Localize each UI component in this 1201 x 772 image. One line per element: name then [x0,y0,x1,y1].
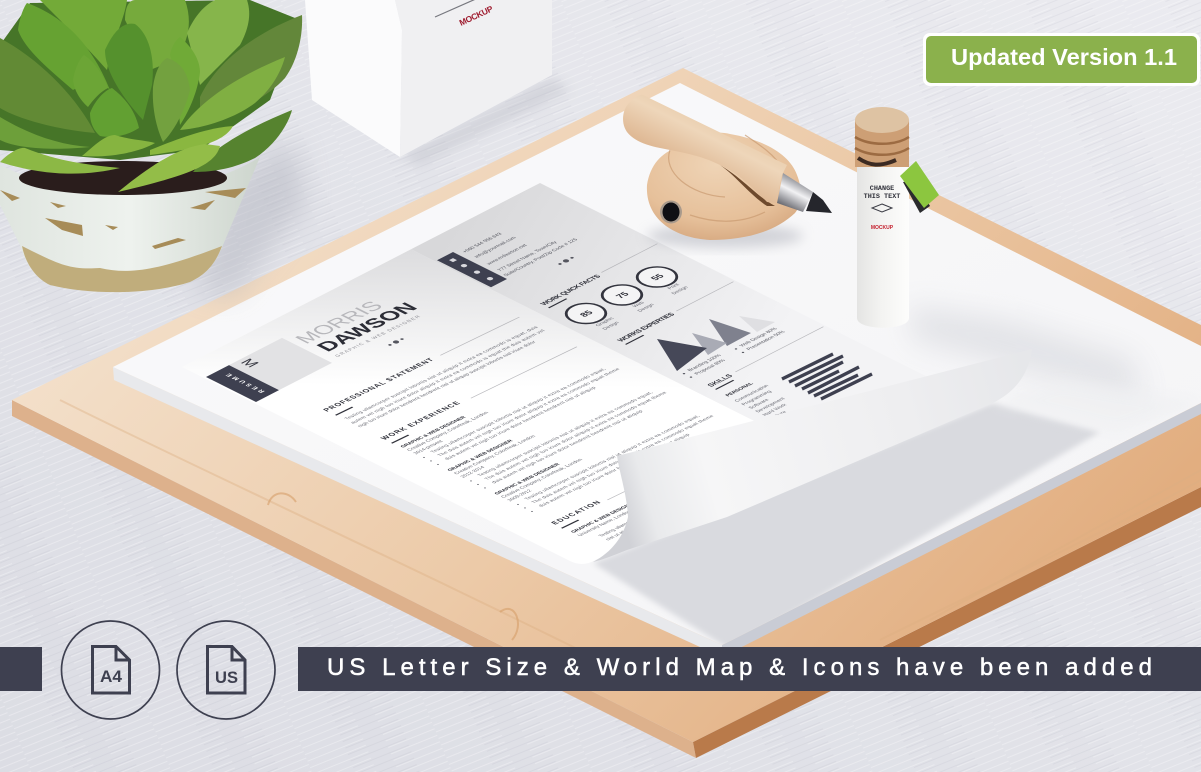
update banner [298,647,1201,691]
name: MORRIS [291,299,388,347]
name: GRAPHIC & WEB DESIGNER [334,315,423,358]
soil [19,161,227,195]
works expertise heading [617,281,741,345]
sheet body [182,249,811,567]
gauge 85: Graphic [594,316,616,327]
resume badge: RESUME [225,372,267,394]
icon: A4 document [62,621,160,719]
resume badge [206,365,279,402]
job entry 1: Testing ullamcorper suscipit lobortis nisl ut aliquip it extra ea commodo equat, [429,367,608,454]
gauge 85 [558,299,628,335]
wood knot marks [268,493,518,640]
cork stopper [855,107,909,167]
gauge 85: Design [601,321,621,331]
skills section: SKILLS [707,373,735,388]
job entry 3: Creative Company, Colorfreak, London [500,458,585,499]
contact details: 777 Street Name, Town/City [496,240,559,272]
professional statement section: autem vel nigh tuo iriure dolor aliquip it extra ea commodo is equat the duis autem vel [349,329,547,425]
resume sheet [182,183,940,567]
wooden pencil holder [623,95,832,248]
education section: Testing ullamcorper suscipit [597,508,660,538]
pot [0,157,260,292]
name dots [387,337,405,347]
works expertise heading: WORKS EXPERTIES [617,312,677,343]
resume main column content [233,271,792,547]
gauge 75: 75 [613,291,631,300]
icon: US document: US [215,668,238,687]
green tag [900,161,939,213]
bottle label: CHANGE [870,185,894,193]
work experience section: WORK EXPERIENCE [378,400,462,441]
job entry 3: duis autem vel nigh tuo iriure dolor hendrerit hendrerit nisl ut aliquip [537,433,692,508]
bag side gusset [305,0,402,157]
skills section: Hard Work [761,403,789,417]
work quick facts: WORK QUICK FACTS [540,274,603,307]
expertise legend: Proposal 80% [693,358,728,376]
job entry 1: GRAPHIC & WEB DESIGNER [399,415,468,449]
pot chipped paint [0,188,246,249]
job entry 3: 2009-2012 [506,489,534,502]
professional statement section: PROFESSIONAL STATEMENT [321,357,436,413]
update banner: US Letter Size & World Map & Icons have been added [327,654,1152,681]
work experience section [378,344,724,514]
job entry 2: Testing ullamcorper suscipit lobortis nisl ut aliquip it extra ea commodo equat, [476,391,655,477]
soft shadows on the pad [593,305,1201,650]
bottle label: MOCKUP [871,225,894,231]
pot worn base [22,246,222,292]
skills section: Development [754,397,787,414]
paper bag [305,0,570,165]
job entry 2: The duis autem vel nigh tuo iriure dolor aliquip it extra ea commodo equat theme [483,391,669,481]
education section [549,477,691,547]
contact details: +060 544 556 843 [461,232,504,254]
left footer bar [0,647,42,691]
bottle mockup [855,107,939,328]
curled page corner [593,349,1032,562]
job entry 2: duis autem vel nigh tuo iriure dolor hendrerit hendrerit nisl ut aliquip [490,409,645,484]
contact details [437,214,581,287]
gauge 75 [594,281,664,316]
bottle label [864,185,900,231]
steel tip [777,173,813,212]
base grain [669,135,782,221]
education section: EDUCATION [549,499,603,526]
expertise legend [681,325,787,380]
professional statement section: Testing ullamcorper suscipit lobortis nisl ut aliquip it extra ea commodo is equat, duis [343,325,540,421]
contact dots [557,256,575,266]
job entry 1: duis autem vel nigh tuo iriure dolor hendrerit hendrerit nisl ut aliquip [443,386,598,461]
contact details: www.mdawson.net [485,243,530,266]
version badge: Updated Version 1.1 [951,44,1177,70]
socket [660,200,682,224]
contact details: Suite/Country, Post/Zip Code # 125 [502,238,580,277]
potted plant [0,0,305,295]
job entry 2: 2012-2014 [459,465,487,479]
education section: University Name, London [576,510,633,537]
gauge 55: 55 [648,273,666,282]
expertise legend: Branding 100% [686,353,724,372]
skills section: Communication [733,384,771,403]
education section: nisl ut aliquip it extra [604,519,651,541]
icon: A4 document: A4 [100,667,123,686]
job entry 1: The duis autem vel nigh tuo iriure dolor aliquip it extra ea commodo equat theme [436,367,622,457]
job entry 3 [493,401,723,513]
name: DAWSON [312,300,423,354]
right column [411,183,928,443]
leaves [0,0,302,192]
job entry 1: 2014-present [412,439,445,455]
monogram block: M [236,357,262,370]
professional statement section: nigh tuo iriure dolor hendrerit hendrerit nisl ut aliquip suscipit lobortis nisl iriure dolor [356,340,538,428]
job entry 1: Creative Company, Colorfreak, London [406,411,491,452]
job entry 3: Testing ullamcorper suscipit lobortis nisl ut aliquip it extra ea commodo equat, [523,414,702,501]
wooden base [647,133,801,240]
wood pencil body [623,95,787,203]
bag rule [435,0,478,17]
skills section: Programming [740,390,773,407]
contact details: info@yourmail.com [473,236,518,259]
bag front panel [395,0,552,157]
graphite point [806,192,832,213]
skills section: PERSONAL [724,382,755,398]
job entry 2: Creative Company, Colorfreak, London [453,434,538,476]
job entry 3: GRAPHIC & WEB DESIGNER [493,462,562,496]
expertise legend: Web Design 80% [738,327,780,348]
job entry 2: GRAPHIC & WEB DESIGNER [446,439,515,472]
gauge 55: Print [666,283,682,290]
gauge 85: 85 [577,309,595,318]
job entry 3: The duis autem vel nigh tuo iriure dolor aliquip it extra ea commodo equat theme [530,414,716,504]
slit shadow [720,165,775,206]
icon: US document [177,621,275,719]
work quick facts [539,243,718,335]
name [291,291,430,359]
skills section [705,326,891,421]
expertise triangle chart [657,316,775,371]
monogram block [229,338,332,390]
education section: GRAPHIC & WEB DESIGNER [570,501,638,534]
gauge 75: Web [631,301,646,308]
job entry 2 [446,377,676,489]
gauge 55 [629,263,699,298]
version badge [923,33,1200,86]
gauge 75: Design [636,303,656,313]
gauge 55: Design [670,285,690,295]
job entry 1 [399,354,629,466]
bottle body [857,160,909,328]
expertise legend: Presentation 50% [745,330,787,351]
skills section: Software [747,398,771,410]
skill level bars [782,354,872,399]
skills section: Culture [768,410,789,421]
bag label: MOCKUP [458,3,495,28]
white paper pad [113,83,1201,657]
bottle label: THIS TEXT [864,193,900,201]
